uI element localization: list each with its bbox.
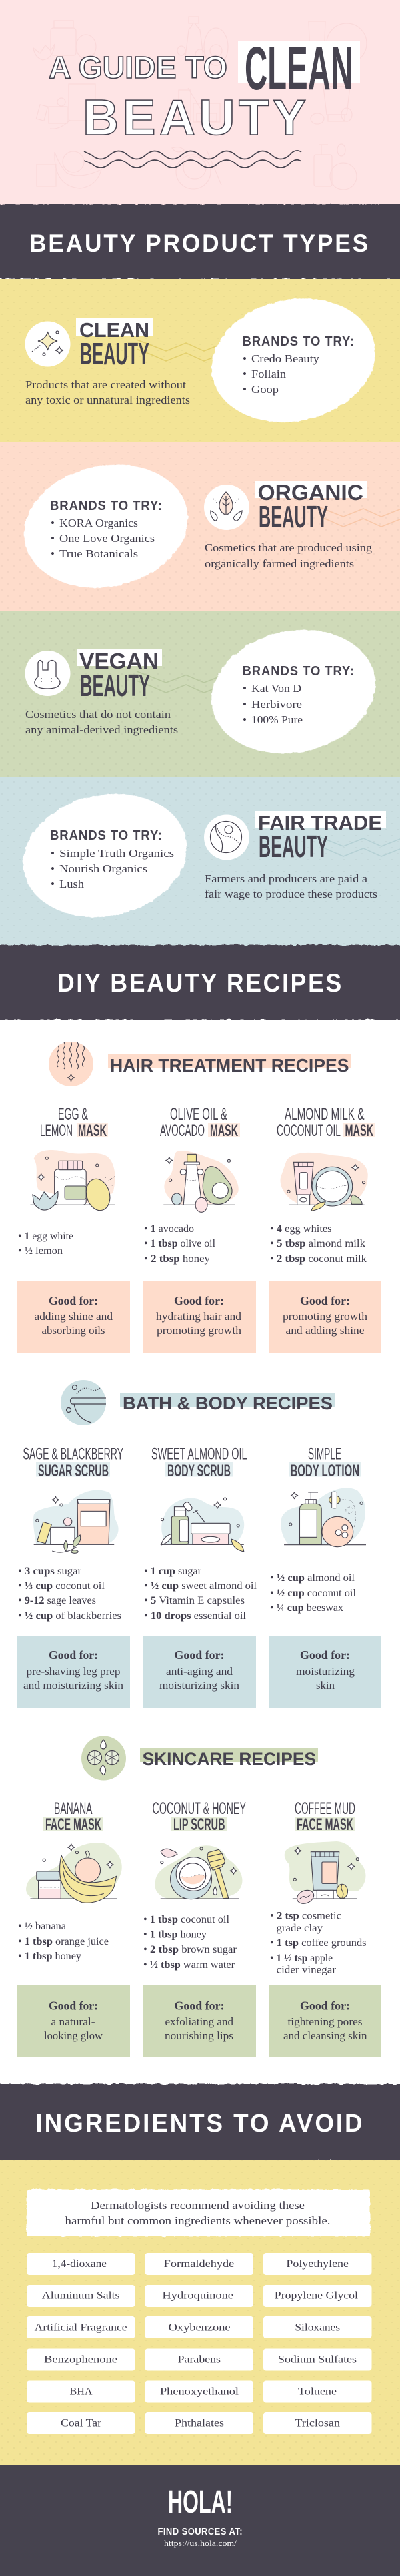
ingredients: • 2 tbsp brown sugar — [143, 1944, 237, 1955]
callout: brands to try: Herbivore — [251, 698, 302, 711]
recipe: banana face mask — [17, 1799, 130, 2057]
good for box: tightening pores — [288, 2015, 363, 2028]
ingredients: grade clay — [276, 1923, 323, 1934]
panel: beauty product types banner — [0, 204, 400, 279]
ingredients: • 1 tbsp orange juice — [18, 1936, 109, 1947]
recipe title — [277, 1105, 375, 1140]
recipe title: BODY SCRUB — [167, 1462, 231, 1480]
heading: diy beauty recipes: DIY BEAUTY RECIPES — [57, 969, 343, 998]
ingredients: • 1 tbsp honey — [18, 1951, 81, 1962]
good for box — [17, 1985, 130, 2057]
good for box: hydrating hair and — [156, 1310, 242, 1323]
illustration: olive oil bottle and avocado — [163, 1151, 239, 1212]
ingredients: • 3 cups sugar — [18, 1566, 82, 1577]
good for box: anti-aging and — [166, 1665, 233, 1678]
illustration: jar, lemon and egg shell — [30, 1150, 116, 1213]
heading: vegan: VEGAN — [79, 649, 159, 673]
recipe title — [43, 1799, 103, 1834]
ingredient pills: Formaldehyde — [164, 2258, 234, 2270]
ingredients — [18, 1231, 73, 1257]
heading: clean: CLEAN — [79, 318, 149, 342]
description — [205, 872, 377, 900]
ingredient pills: Benzophenone — [44, 2354, 117, 2366]
good for box: promoting growth — [283, 1310, 368, 1323]
ingredient pills: BHA — [69, 2386, 93, 2398]
heading: fair trade: FAIR TRADE — [258, 811, 382, 834]
illustration: coconut, honey dipper and lips — [155, 1845, 242, 1899]
good for box: and adding shine — [285, 1324, 364, 1337]
panel: footer — [0, 2465, 400, 2576]
icon: cucumber slices — [81, 1736, 126, 1781]
description — [25, 708, 178, 736]
callout: brands to try: • — [51, 532, 55, 545]
good for box: and moisturizing skin — [23, 1679, 123, 1692]
callout: brands to try: BRANDS TO TRY: — [50, 499, 163, 513]
good for box: nourishing lips — [165, 2029, 233, 2042]
good for box: moisturizing — [296, 1665, 355, 1678]
callout: brands to try: BRANDS TO TRY: — [50, 828, 163, 843]
ingredients — [270, 1223, 367, 1265]
icon: hair — [49, 1042, 93, 1086]
ingredient pills: Phthalates — [175, 2417, 224, 2429]
panel: ingredients to avoid list — [0, 2160, 400, 2465]
recipe title: SUGAR SCRUB — [38, 1462, 109, 1480]
illustration: tube and coconut ring — [281, 1153, 368, 1211]
illustration: pump bottle, bee and ball — [281, 1488, 366, 1547]
callout: brands to try: KORA Organics — [59, 517, 138, 529]
ingredients: • 1 ½ tsp apple — [270, 1953, 333, 1964]
ingredient pills: Oxybenzone — [169, 2322, 231, 2334]
recipe title: MASK — [78, 1122, 107, 1140]
illustration: sugar scrub bag and box — [33, 1490, 119, 1553]
recipe title: FACE MASK — [45, 1815, 101, 1834]
recipe: egg and lemon mask — [17, 1105, 130, 1353]
panel: diy beauty recipes banner — [0, 945, 400, 1020]
good for box: a natural- — [51, 2015, 95, 2028]
ingredients — [144, 1223, 216, 1265]
callout: brands to try: Credo Beauty — [251, 352, 320, 365]
icon: leaves — [204, 485, 249, 530]
illustration: mud mask tube and coffee beans — [285, 1841, 365, 1906]
icon: globe — [204, 815, 249, 860]
description: fair wage to produce these products — [205, 888, 377, 900]
recipe: simple body lotion — [269, 1445, 381, 1708]
good for box: pre-shaving leg prep — [27, 1665, 120, 1678]
ingredients: • 1 tbsp honey — [143, 1929, 207, 1941]
recipe: olive oil and avocado mask — [143, 1105, 256, 1353]
recipe title: OLIVE OIL & — [170, 1105, 227, 1124]
ingredient pills: Polyethylene — [286, 2258, 349, 2270]
good for box: Good for: — [300, 1999, 350, 2013]
good for box: Good for: — [49, 1294, 98, 1307]
callout: brands to try: Goop — [251, 383, 279, 396]
panel: title header — [0, 0, 400, 206]
ingredients: • 1 avocado — [144, 1223, 194, 1235]
ingredients: • 9-12 sage leaves — [18, 1595, 96, 1606]
ingredients: • ½ cup sweet almond oil — [144, 1580, 257, 1592]
good for box: adding shine and — [35, 1310, 113, 1323]
ingredients — [144, 1566, 257, 1622]
recipe title — [151, 1445, 247, 1480]
ingredient pills: Artificial Fragrance — [35, 2322, 127, 2334]
callout: brands to try — [200, 284, 387, 437]
callout: brands to try — [200, 615, 387, 768]
good for box: moisturizing skin — [159, 1679, 239, 1692]
ingredients: • ½ cup of blackberries — [18, 1610, 121, 1622]
recipe title: BANANA — [54, 1799, 93, 1818]
recipe: sweet almond oil body scrub — [143, 1445, 257, 1708]
recipe title — [289, 1445, 361, 1480]
callout: brands to try: Lush — [59, 878, 85, 890]
good for box: promoting growth — [157, 1324, 242, 1337]
recipe title: MASK — [345, 1122, 373, 1140]
ingredients: • 1 tsp coffee grounds — [270, 1937, 367, 1949]
ingredient pills: 1,4-dioxane — [52, 2258, 107, 2270]
ingredients — [270, 1910, 367, 1975]
panel: clean beauty — [0, 279, 400, 442]
heading: a guide to: A GUIDE TO — [49, 50, 227, 85]
good for box: looking glow — [44, 2029, 103, 2042]
good for box: Good for: — [300, 1648, 350, 1662]
ingredient pills: Coal Tar — [61, 2417, 102, 2429]
good for box: Good for: — [300, 1294, 350, 1307]
description: Products that are created without — [25, 378, 186, 391]
ingredient pills: Propylene Glycol — [275, 2290, 359, 2302]
callout: dermatologists recommendation — [27, 2190, 370, 2236]
ingredient pills: Siloxanes — [295, 2322, 340, 2334]
callout: brands to try: Nourish Organics — [59, 862, 147, 875]
good for box — [143, 1636, 256, 1708]
description: any toxic or unnatural ingredients — [25, 394, 190, 406]
good for box: Good for: — [49, 1648, 98, 1662]
callout: brands to try: • — [243, 368, 247, 380]
ingredients: • ½ lemon — [18, 1245, 63, 1257]
good for box — [269, 1985, 381, 2057]
ingredient pills: Phenoxyethanol — [160, 2386, 239, 2398]
ingredients: • 1 tbsp coconut oil — [143, 1914, 230, 1925]
description — [205, 541, 373, 570]
logo: hola: HOLA! — [168, 2485, 233, 2520]
good for box: absorbing oils — [41, 1324, 105, 1337]
good for box — [17, 1636, 130, 1708]
recipe title: EGG & — [58, 1105, 88, 1124]
ingredients: • 1 cup sugar — [144, 1566, 202, 1577]
callout: brands to try: True Botanicals — [59, 547, 138, 560]
callout: brands to try: BRANDS TO TRY: — [243, 664, 355, 679]
description: organically farmed ingredients — [205, 557, 354, 570]
heading: bath and body recipes: BATH & BODY RECIPES — [123, 1393, 333, 1413]
callout: brands to try — [13, 450, 199, 603]
heading: beauty: BEAUTY — [259, 829, 328, 864]
callout: brands to try — [11, 779, 199, 932]
good for box: Good for: — [175, 1999, 224, 2013]
good for box — [269, 1636, 381, 1708]
ingredients: • 2 tbsp honey — [144, 1253, 210, 1265]
recipe title — [160, 1105, 240, 1140]
heading: organic: ORGANIC — [257, 481, 363, 505]
recipe title — [152, 1799, 246, 1834]
ingredients: • 10 drops essential oil — [144, 1610, 247, 1622]
good for box: exfoliating and — [165, 2015, 234, 2028]
panel: fair trade beauty — [0, 777, 400, 946]
description: any animal-derived ingredients — [25, 723, 178, 736]
good for box — [269, 1281, 381, 1353]
panel: vegan beauty — [0, 611, 400, 777]
heading: hair treatment recipes: HAIR TREATMENT RECIPES — [110, 1055, 349, 1076]
panel: organic beauty — [0, 442, 400, 612]
ingredient pills: Hydroquinone — [162, 2290, 233, 2302]
callout: brands to try: Simple Truth Organics — [59, 847, 174, 860]
callout: dermatologists recommendation: harmful but common ingredients whenever possible. — [65, 2214, 331, 2227]
recipe title: SWEET ALMOND OIL — [151, 1445, 247, 1464]
description: Farmers and producers are paid a — [205, 872, 367, 885]
recipe title: COCONUT & HONEY — [152, 1799, 246, 1818]
ingredients — [18, 1566, 121, 1622]
ingredients: • ¼ cup beeswax — [270, 1602, 343, 1614]
callout: brands to try: 100% Pure — [251, 713, 303, 726]
ingredients: • 5 Vitamin E capsules — [144, 1595, 245, 1606]
ingredients — [18, 1921, 109, 1962]
icon: bunny — [25, 651, 71, 696]
ingredient pills: Parabens — [178, 2354, 221, 2366]
ingredient pills: Triclosan — [295, 2417, 340, 2429]
heading: beauty: BEAUTY — [80, 336, 149, 371]
heading: beauty: BEAUTY — [259, 499, 328, 534]
callout: brands to try: Follain — [251, 368, 287, 380]
recipe title: FACE MASK — [297, 1815, 353, 1834]
ingredients: • 1 tbsp olive oil — [144, 1238, 216, 1249]
zigzag decoration — [320, 507, 400, 527]
callout: brands to try: • — [51, 862, 55, 875]
recipe: sage and blackberry sugar scrub — [17, 1445, 130, 1708]
ingredients: • ½ cup almond oil — [270, 1572, 355, 1584]
zigzag decoration — [137, 671, 219, 693]
recipe title: AVOCADO — [160, 1122, 205, 1140]
recipe title: MASK — [210, 1122, 238, 1140]
recipe title: SAGE & BLACKBERRY — [23, 1445, 123, 1464]
good for box: and cleansing skin — [283, 2029, 367, 2042]
ingredients: • 2 tbsp coconut milk — [270, 1253, 367, 1265]
ingredients — [270, 1572, 357, 1614]
sources heading: FIND SOURCES AT: — [157, 2527, 243, 2537]
recipe title — [40, 1105, 108, 1140]
description — [25, 378, 190, 406]
recipe title: COCONUT OIL — [277, 1122, 341, 1140]
callout: brands to try: • — [243, 383, 247, 396]
description: Cosmetics that do not contain — [25, 708, 171, 721]
callout: brands to try: BRANDS TO TRY: — [243, 334, 355, 349]
heading: beauty: BEAUTY — [83, 89, 306, 145]
recipe title: LIP SCRUB — [173, 1815, 225, 1834]
heading: ingredients to avoid: INGREDIENTS TO AVOID — [36, 2110, 364, 2138]
ingredient pills: Toluene — [298, 2386, 337, 2398]
good for box: Good for: — [49, 1999, 98, 2013]
ingredients: • ⅓ cup coconut oil — [18, 1580, 105, 1592]
ingredients: cider vinegar — [276, 1965, 337, 1975]
callout: dermatologists recommendation: Dermatologists recommend avoiding these — [91, 2199, 305, 2212]
description: Cosmetics that are produced using — [205, 541, 373, 554]
heading: beauty product types: BEAUTY PRODUCT TYPES — [29, 230, 370, 257]
ingredients: • 4 egg whites — [270, 1223, 332, 1235]
callout: brands to try: • — [51, 547, 55, 560]
panel: bath and body recipes — [17, 1380, 381, 1708]
ingredients: • 2 tsp cosmetic — [270, 1910, 341, 1922]
ingredients: • ½ cup coconut oil — [270, 1588, 357, 1599]
good for box — [143, 1985, 256, 2057]
illustration: banana, orange and jar — [26, 1843, 122, 1903]
callout: brands to try: • — [243, 352, 247, 365]
ingredients — [143, 1914, 237, 1971]
recipe title — [23, 1445, 123, 1480]
ingredients: • ½ tbsp warm water — [143, 1959, 235, 1971]
zigzag decoration — [320, 837, 400, 856]
callout: brands to try: • — [51, 517, 55, 529]
good for box — [143, 1281, 256, 1353]
faint background product icons — [33, 17, 367, 190]
recipe title — [295, 1799, 355, 1834]
wavy double divider — [84, 151, 301, 168]
illustration: dropper bottle and jar — [161, 1498, 244, 1552]
sources url: https://us.hola.com/ — [164, 2538, 237, 2548]
ingredient pills: Sodium Sulfates — [278, 2354, 357, 2366]
callout: brands to try: • — [243, 682, 247, 695]
callout: brands to try: • — [51, 847, 55, 860]
panel: ingredients to avoid banner — [0, 2084, 400, 2160]
good for box — [17, 1281, 130, 1353]
heading: beauty: BEAUTY — [80, 668, 150, 703]
ingredient pills: Aluminum Salts — [42, 2290, 119, 2302]
callout: brands to try: One Love Organics — [59, 532, 155, 545]
callout: brands to try: • — [243, 713, 247, 726]
good for box: Good for: — [175, 1648, 224, 1662]
callout: brands to try: • — [243, 698, 247, 711]
icon: bowl — [61, 1380, 106, 1425]
recipe: coffee mud face mask — [269, 1799, 381, 2057]
recipe: coconut and honey lip scrub — [143, 1799, 256, 2057]
ingredients: • ½ banana — [18, 1921, 66, 1932]
callout: brands to try: Kat Von D — [251, 682, 301, 695]
panel: skincare recipes — [17, 1736, 381, 2057]
recipe title: SIMPLE — [308, 1445, 341, 1464]
icon: sparkles — [25, 321, 71, 366]
ingredients: • 1 egg white — [18, 1231, 73, 1242]
heading: skincare recipes: SKINCARE RECIPES — [143, 1749, 316, 1769]
panel: hair treatment recipes — [17, 1042, 381, 1353]
ingredients: • 5 tbsp almond milk — [270, 1238, 365, 1249]
ingredient pills — [27, 2253, 372, 2434]
recipe title: LEMON — [40, 1122, 73, 1140]
recipe: almond milk and coconut oil mask — [269, 1105, 381, 1353]
good for box: skin — [316, 1679, 335, 1692]
zigzag decoration — [137, 340, 219, 361]
good for box: Good for: — [174, 1294, 224, 1307]
callout: brands to try: • — [51, 878, 55, 890]
